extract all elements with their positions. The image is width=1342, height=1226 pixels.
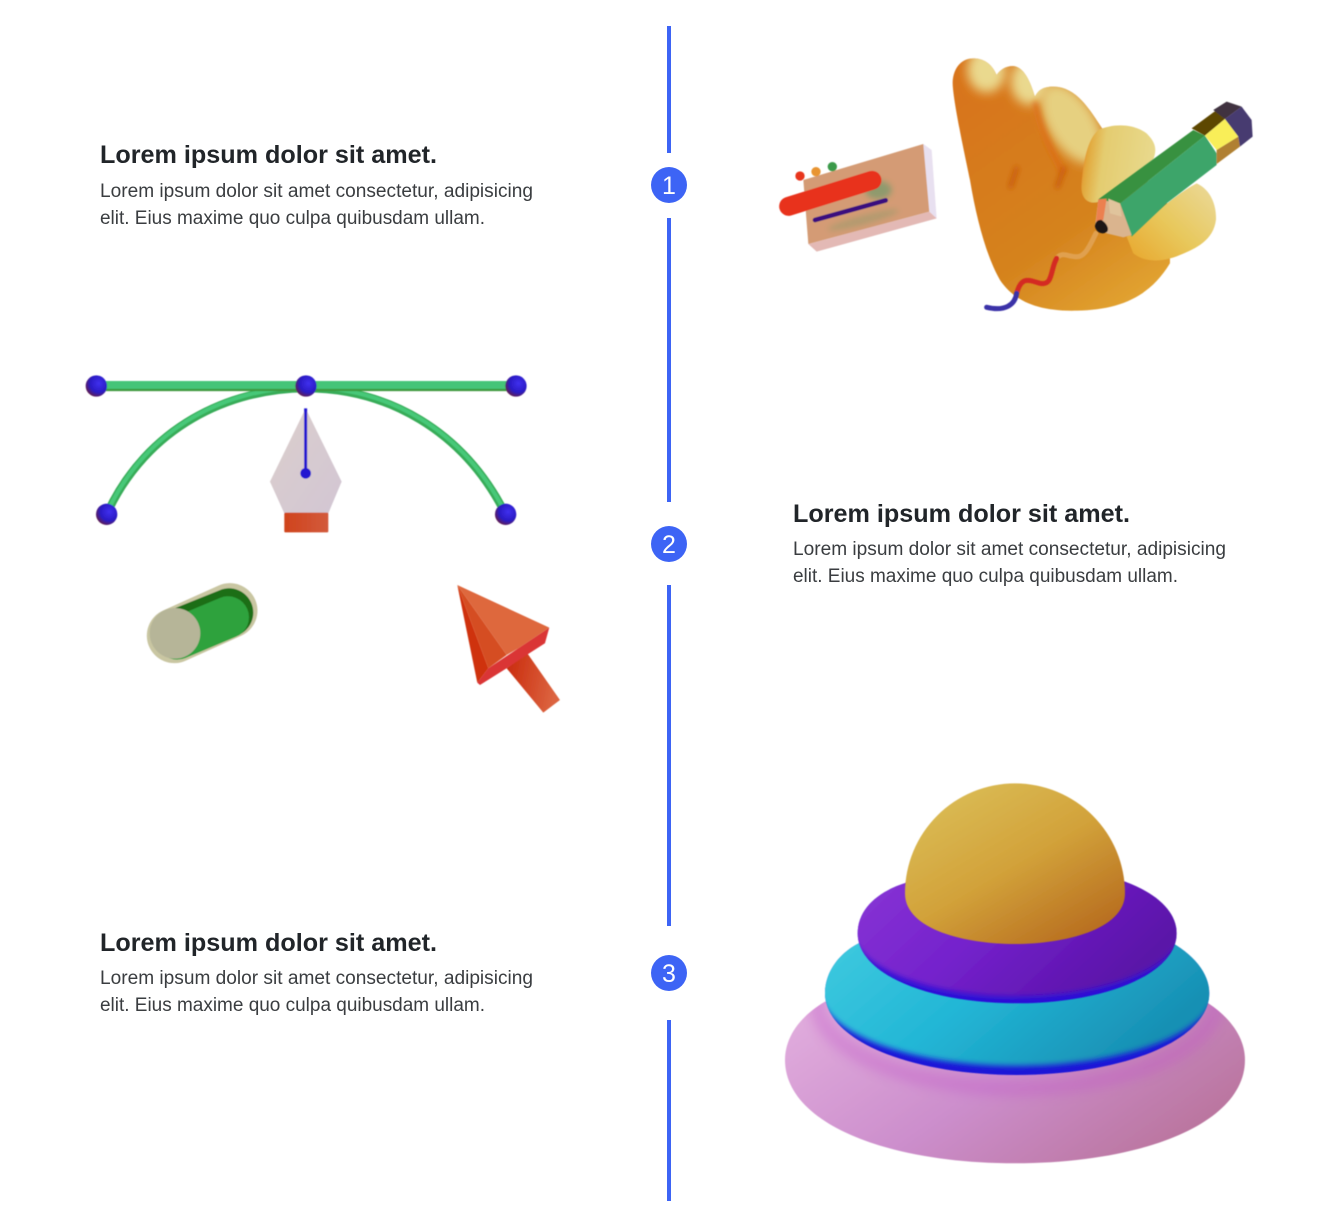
icon: pen nib bbox=[270, 408, 342, 532]
icon: pencil bbox=[1095, 102, 1253, 237]
icon: hand bbox=[953, 47, 1216, 311]
text block 3 bbox=[100, 929, 533, 1016]
step 1 marker bbox=[651, 167, 687, 203]
step 2 marker: 2 bbox=[662, 531, 676, 559]
text block 3: Lorem ipsum dolor sit amet consectetur, adipisicing bbox=[100, 968, 533, 989]
text block 2: Lorem ipsum dolor sit amet. bbox=[793, 500, 1130, 528]
text block 1 bbox=[100, 141, 533, 229]
cyan ring bbox=[824, 942, 1210, 1076]
text block 3: Lorem ipsum dolor sit amet. bbox=[100, 929, 437, 957]
timeline line bbox=[667, 26, 671, 1201]
text block 1: Lorem ipsum dolor sit amet. bbox=[100, 141, 437, 169]
purple ring bbox=[851, 872, 1183, 1003]
text block 2 bbox=[793, 500, 1226, 587]
illustration: bezier pen tool, toggle and cursor bbox=[86, 375, 560, 713]
step 3 marker: 3 bbox=[662, 960, 676, 988]
text block 2: Lorem ipsum dolor sit amet consectetur, adipisicing bbox=[793, 539, 1226, 560]
illustration: hand with pencil and card bbox=[789, 47, 1253, 311]
step 1 marker: 1 bbox=[662, 172, 676, 200]
icon: squiggle line bbox=[987, 233, 1096, 309]
step 2 marker bbox=[651, 526, 687, 562]
step 3 marker bbox=[651, 955, 687, 991]
yellow dome bbox=[905, 783, 1125, 944]
text block 2: elit. Eius maxime quo culpa quibusdam ullam. bbox=[793, 566, 1178, 587]
text block 1: Lorem ipsum dolor sit amet consectetur, adipisicing bbox=[100, 181, 533, 202]
pink base bbox=[784, 1001, 1246, 1164]
icon: bezier curve bbox=[86, 375, 527, 525]
icon: arrow cursor bbox=[457, 585, 560, 713]
icon: toggle switch bbox=[150, 608, 230, 659]
text block 1: elit. Eius maxime quo culpa quibusdam ullam. bbox=[100, 208, 485, 229]
icon: interface card bbox=[789, 144, 937, 252]
text block 3: elit. Eius maxime quo culpa quibusdam ullam. bbox=[100, 995, 485, 1016]
illustration: stacked rings and dome bbox=[785, 783, 1245, 1163]
